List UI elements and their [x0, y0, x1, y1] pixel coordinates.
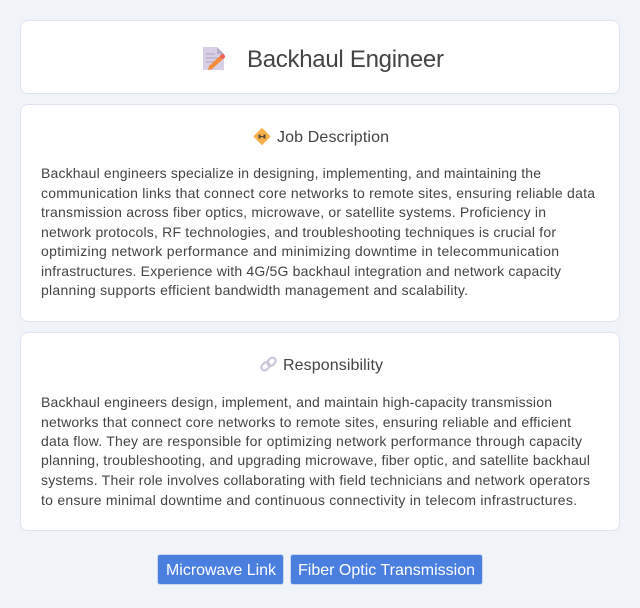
heading: responsibility: Responsibility: [283, 357, 383, 374]
text block: job description body: optimizing network performance and minimizing downtime in telecommunication: [41, 243, 559, 259]
panel: job description card: [20, 104, 620, 322]
tag: Fiber Optic Transmission button: [290, 554, 483, 585]
heading: job description: Job Description: [277, 129, 389, 146]
icon: orange diamond sign: [254, 128, 270, 144]
icon: document with pencil: [203, 47, 225, 70]
label: Microwave Link: Microwave Link: [166, 562, 277, 579]
text block: job description body: Backhaul engineers specialize in designing, implementing, and maintaining the: [41, 165, 541, 181]
text block: job description body: transmission across fiber optics, microwave, or satellite systems. Proficiency in: [41, 204, 546, 220]
tag: Microwave Link button: [157, 554, 284, 585]
panel: responsibility card: [20, 332, 620, 531]
text block: job description body: network protocols, RF technologies, and troubleshooting techniques is crucial for: [41, 224, 556, 240]
title: Backhaul Engineer: [247, 46, 444, 73]
text block: job description body: planning supports efficient bandwidth management and scalability.: [41, 282, 468, 298]
icon: chain link: [260, 356, 277, 372]
text block: responsibility body: networks that connect core networks to remote sites, ensuring reliable and efficient: [41, 414, 571, 430]
text block: responsibility body: data flow. They are responsible for optimizing network performance through capacity: [41, 433, 582, 449]
text block: responsibility body: systems. Their role involves collaborating with field technicians and network operators: [41, 472, 590, 488]
text block: job description body: infrastructures. Experience with 4G/5G backhaul integration and network capacity: [41, 263, 561, 279]
text block: responsibility body: to ensure minimal downtime and continuous connectivity in telecom infrastructures.: [41, 492, 577, 508]
text block: job description body: communication links that connect core networks to remote sites, ensuring reliable data: [41, 185, 595, 201]
text block: responsibility body: Backhaul engineers design, implement, and maintain high-capacity transmission: [41, 394, 552, 410]
text block: job description body: [41, 165, 595, 298]
text block: responsibility body: planning, troubleshooting, and upgrading microwave, fiber optic, and satellite backhaul: [41, 452, 590, 468]
panel: title card: [20, 20, 620, 94]
text block: responsibility body: [41, 394, 590, 508]
label: Fiber Optic Transmission: Fiber Optic Transmission: [298, 562, 475, 579]
